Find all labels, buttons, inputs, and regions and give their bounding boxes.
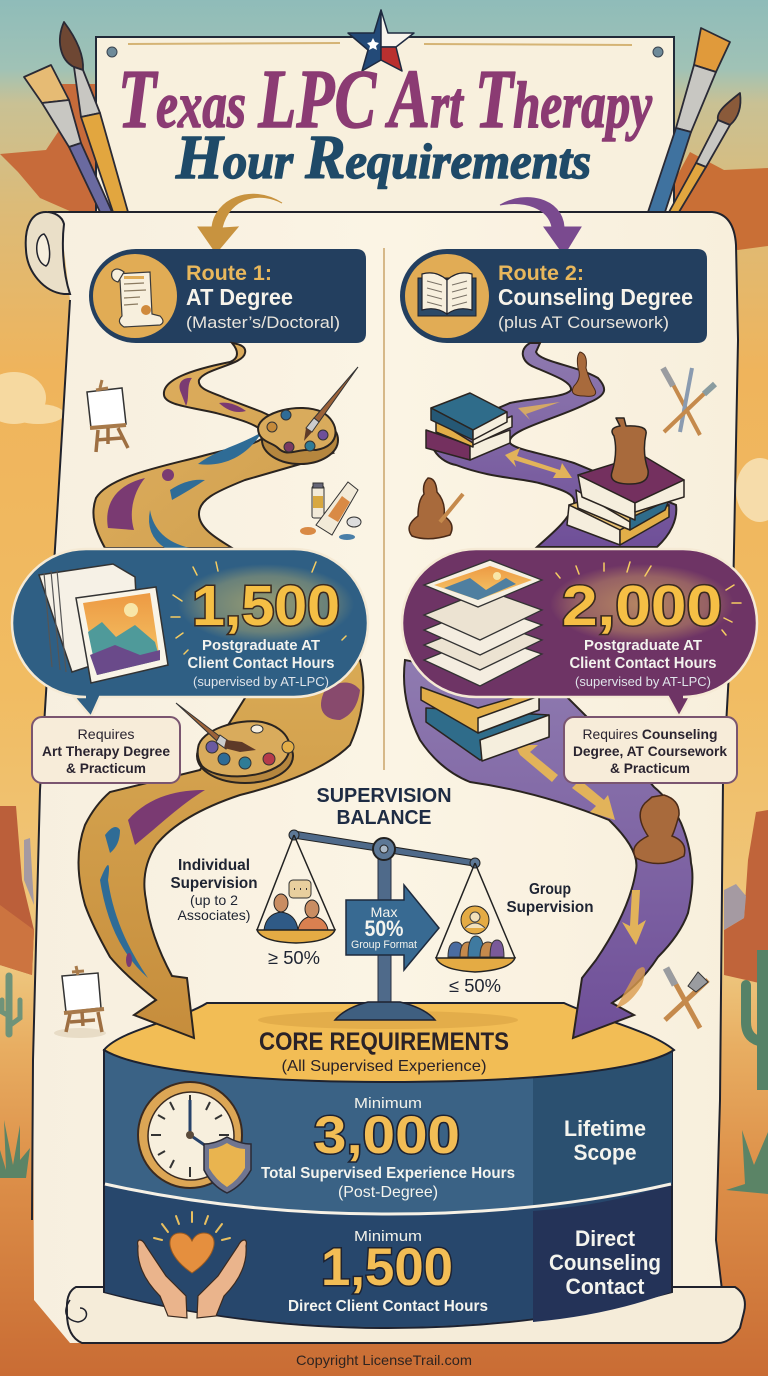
panel: route 1 hours bubble: Postgraduate AT bbox=[202, 637, 320, 654]
text: total supervised hours: Total Supervised Experience Hours bbox=[261, 1165, 515, 1182]
panel: route 2 header: (plus AT Coursework) bbox=[498, 313, 669, 332]
label: individual supervision: Supervision bbox=[170, 875, 258, 892]
arrow: max 50% group format: 50% bbox=[364, 916, 404, 941]
title: Texas LPC Art Therapy bbox=[118, 53, 653, 146]
title bbox=[118, 53, 653, 192]
arrow: route 2 bbox=[500, 198, 581, 255]
heading: supervision balance: SUPERVISION bbox=[316, 785, 452, 807]
panel: route 2 hours bubble: (supervised by AT-LPC) bbox=[575, 674, 711, 689]
label: direct counseling contact: Counseling bbox=[549, 1250, 661, 1275]
arrow: max 50% group format bbox=[346, 885, 439, 970]
text: direct client hours: 1,500 bbox=[321, 1238, 453, 1297]
panel: main parchment scroll bbox=[26, 212, 738, 1343]
label: group percentage: ≤ 50% bbox=[449, 976, 501, 996]
chart: route 1 paint road arrow (lower) bbox=[78, 660, 363, 1038]
rays around 1,500 bbox=[171, 562, 346, 654]
icon: palette with brush (lower left) bbox=[176, 703, 294, 783]
text: total supervised hours: 3,000 bbox=[314, 1106, 460, 1165]
arrow: max 50% group format: Max bbox=[370, 904, 398, 920]
paint brushes, right bbox=[648, 28, 741, 212]
callout: route 2 prerequisites bbox=[564, 717, 737, 783]
callout: route 1 prerequisites: Art Therapy Degree bbox=[42, 743, 170, 759]
right pan: group supervision bbox=[436, 863, 515, 972]
panel: route 2 hours bubble: 2,000 bbox=[562, 574, 722, 638]
paint brushes, left bbox=[24, 22, 128, 212]
heading: supervision balance: BALANCE bbox=[336, 807, 432, 829]
label: individual supervision: Individual bbox=[178, 857, 250, 874]
cacti and agave plants bbox=[0, 950, 768, 1194]
panel: route 1 hours bubble: 1,500 bbox=[192, 574, 340, 638]
panel: title banner paper bbox=[96, 37, 674, 227]
icon: palette with brush (upper left) bbox=[258, 367, 358, 464]
chart: route 2 winding purple road (upper) bbox=[434, 343, 676, 547]
icon: open book bbox=[405, 254, 489, 338]
icon: stack of three books bbox=[426, 393, 512, 460]
label: individual supervision bbox=[170, 857, 258, 923]
icon: crossed brushes (upper right) bbox=[663, 368, 715, 435]
label: lifetime scope: Lifetime bbox=[564, 1116, 646, 1141]
icon: small clay figure on the road bbox=[572, 352, 596, 396]
icon: book stack with torso sculpture bbox=[567, 418, 684, 545]
panel: route 1 header: Route 1: bbox=[186, 262, 272, 285]
callout: route 1 prerequisites: & Practicum bbox=[66, 760, 146, 776]
label: group supervision: Group bbox=[529, 881, 571, 898]
heading: core requirements: CORE REQUIREMENTS bbox=[259, 1028, 509, 1056]
icon: diploma scroll bbox=[93, 254, 177, 338]
arrow: route 1 bbox=[198, 194, 282, 253]
panel: route 1 hours bubble: (supervised by AT-LPC) bbox=[193, 674, 329, 689]
rays around 2,000 bbox=[556, 562, 741, 635]
text: direct client hours bbox=[288, 1228, 488, 1315]
icon: Texas star bbox=[348, 10, 414, 71]
label: individual supervision: (up to 2 bbox=[190, 892, 238, 908]
chart: route 2 purple road arrow (lower) bbox=[404, 660, 692, 1038]
panel: route 1 hours bubble: Client Contact Hours bbox=[188, 655, 334, 672]
left pan: individual supervision bbox=[257, 835, 335, 943]
icon: easel (upper left) bbox=[87, 380, 128, 452]
icon: paint tubes bbox=[300, 482, 361, 540]
panel: route 1 header: AT Degree bbox=[186, 284, 293, 310]
callout: route 1 prerequisites bbox=[32, 717, 180, 783]
heading: core requirements bbox=[259, 1028, 509, 1075]
heading: supervision balance bbox=[316, 785, 452, 829]
text: total supervised hours bbox=[261, 1095, 515, 1201]
text: direct client hours: Minimum bbox=[354, 1228, 422, 1245]
icon: clock with shield bbox=[138, 1082, 251, 1193]
panel: core requirements drum bbox=[104, 1003, 674, 1328]
icon: easel (lower left) bbox=[54, 966, 106, 1038]
callout: route 1 prerequisites: Requires bbox=[78, 726, 134, 742]
panel: route 2 hours bubble: Postgraduate AT bbox=[584, 637, 702, 654]
label: lifetime scope: Scope bbox=[574, 1140, 636, 1165]
panel: route 1 hours bubble bbox=[12, 549, 368, 717]
panel: route 1 header: (Master’s/Doctoral) bbox=[186, 313, 340, 332]
panel: route 2 hours bubble: Client Contact Hours bbox=[570, 655, 716, 672]
text: total supervised hours: Minimum bbox=[354, 1095, 422, 1112]
label: individual percentage: ≥ 50% bbox=[268, 948, 320, 968]
panel: route 2 header: Counseling Degree bbox=[498, 284, 693, 310]
chart: route 1 winding paint road (upper) bbox=[93, 343, 333, 548]
chart: supervision balance scale bbox=[257, 830, 515, 1020]
icon: books on lower purple road bbox=[421, 687, 549, 761]
heading: core requirements: (All Supervised Experience) bbox=[282, 1058, 486, 1075]
icon: crossed brushes (lower right) bbox=[665, 968, 708, 1028]
panel: route 2 header: Route 2: bbox=[498, 262, 584, 285]
title: Hour Requirements bbox=[175, 124, 591, 192]
panel: bottom scroll roll bbox=[66, 1287, 745, 1343]
text: total supervised hours: (Post-Degree) bbox=[338, 1184, 438, 1201]
callout: route 2 prerequisites: Requires Counseling bbox=[582, 726, 718, 742]
label: direct counseling contact: Direct bbox=[575, 1226, 636, 1251]
callout: route 2 prerequisites: Degree, AT Coursework bbox=[573, 743, 727, 759]
callout: route 2 prerequisites: & Practicum bbox=[610, 760, 690, 776]
icon: clay torso on lower road bbox=[634, 795, 685, 864]
panel: route 2 hours bubble bbox=[402, 549, 757, 717]
copyright: Copyright LicenseTrail.com bbox=[296, 1352, 472, 1368]
text: direct client hours: Direct Client Contact Hours bbox=[288, 1298, 488, 1315]
icon: clay sculpture with tool bbox=[409, 478, 463, 539]
panel: route 1 header bbox=[89, 249, 366, 343]
panel: route 2 header bbox=[400, 249, 707, 343]
label: group supervision bbox=[506, 881, 594, 916]
icon: hands holding a heart bbox=[138, 1212, 246, 1318]
label: individual supervision: Associates) bbox=[178, 907, 250, 923]
label: lifetime scope bbox=[564, 1116, 646, 1165]
label: direct counseling contact bbox=[549, 1226, 661, 1299]
icon: stack of paintings bbox=[424, 560, 542, 686]
label: group supervision: Supervision bbox=[506, 899, 594, 916]
arrow: max 50% group format: Group Format bbox=[351, 939, 417, 951]
label: direct counseling contact: Contact bbox=[566, 1274, 645, 1299]
icon: canvas stack and sunset painting bbox=[39, 564, 168, 683]
